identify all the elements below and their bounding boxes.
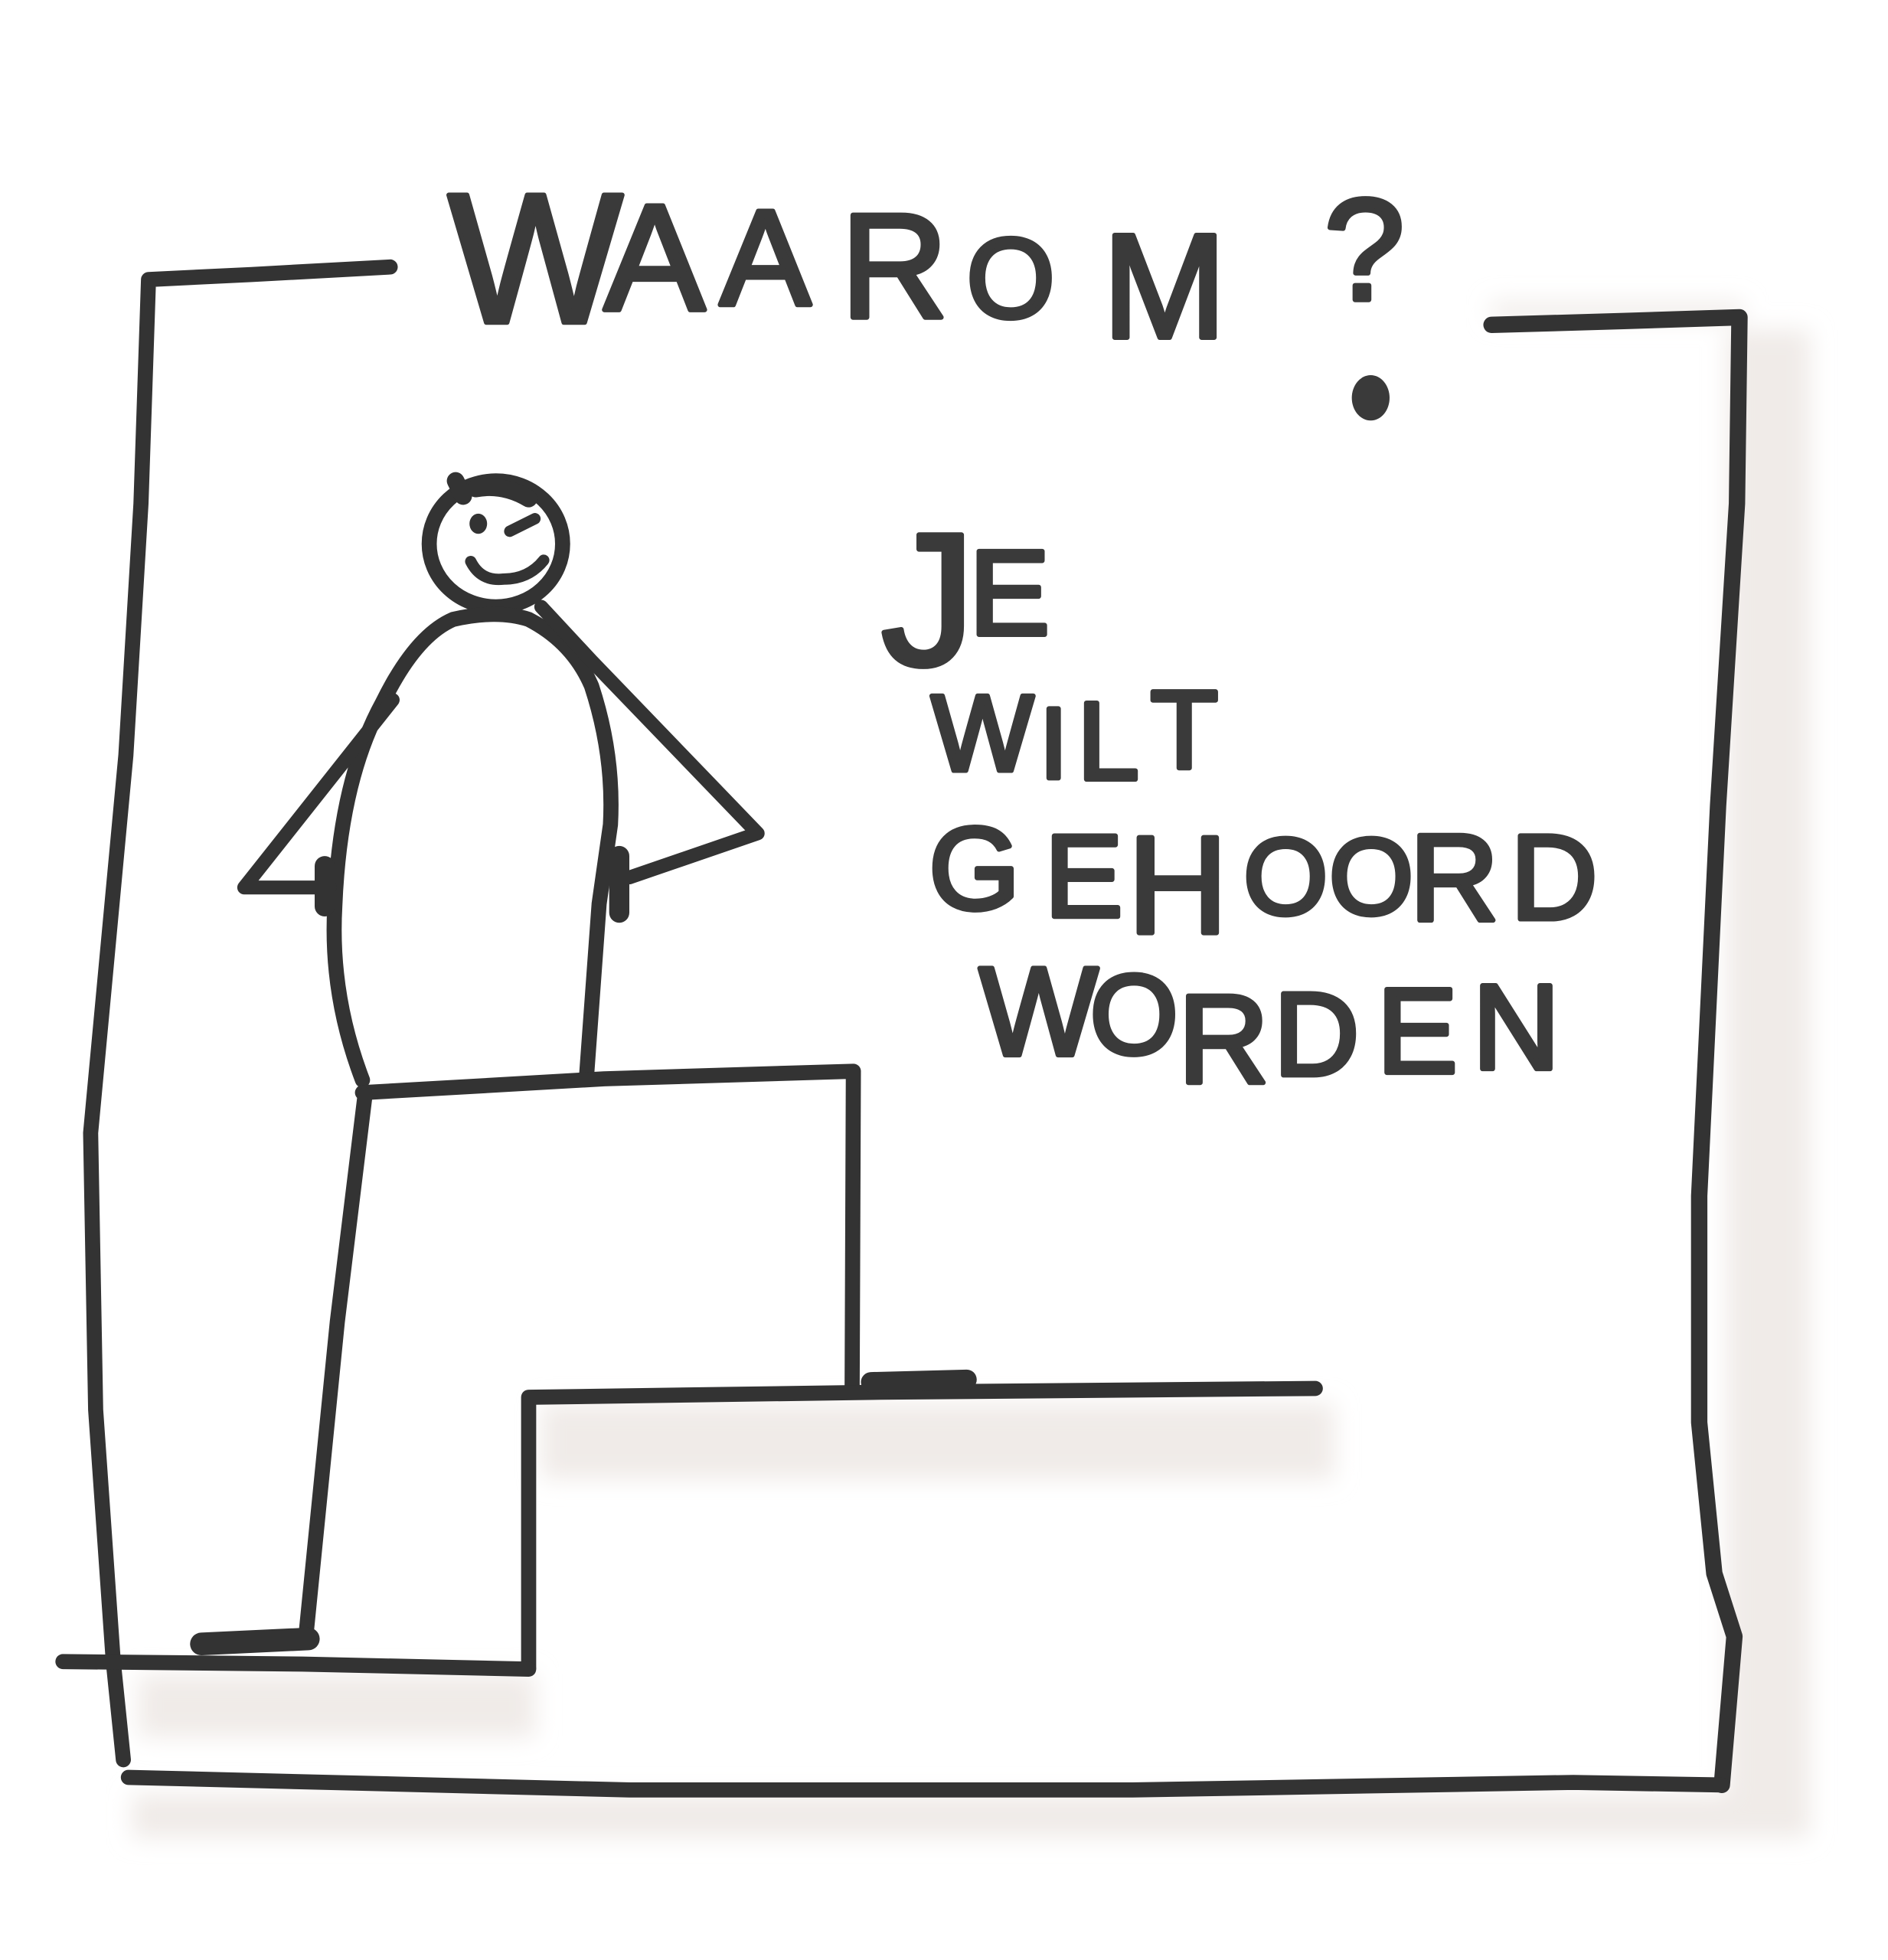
text: je wilt gehoord worden: H [1128, 808, 1228, 962]
text: je wilt gehoord worden: O [1329, 816, 1413, 937]
body [334, 614, 611, 1080]
text: je wilt gehoord worden: E [1045, 812, 1122, 942]
text: je wilt gehoord worden: D [1274, 968, 1359, 1100]
title: Waarom?: O [967, 215, 1055, 341]
right arm [541, 607, 758, 877]
text: je wilt gehoord worden: J [881, 495, 975, 705]
text: je wilt gehoord worden: E [969, 526, 1050, 661]
text: je wilt gehoord worden: G [929, 804, 1020, 934]
picture frame [90, 267, 1739, 1790]
text: je wilt gehoord worden: I [1040, 687, 1067, 799]
title: Waarom?: W [448, 155, 622, 362]
text: je wilt gehoord worden: E [1377, 964, 1458, 1099]
paper shadows [132, 302, 1810, 1838]
stick figure [244, 481, 758, 1080]
left arm [244, 700, 393, 887]
text: je wilt gehoord worden: W [932, 672, 1034, 793]
title: Waarom?: M [1102, 204, 1227, 370]
text: je wilt gehoord worden: D [1511, 810, 1598, 945]
text: je wilt gehoord worden: W [979, 941, 1098, 1082]
head [430, 481, 563, 607]
text: je wilt gehoord worden [881, 495, 1598, 1109]
title: Waarom?: R [841, 183, 948, 349]
hands [325, 856, 619, 913]
staircase [63, 1071, 1315, 1669]
title: Waarom? [448, 155, 1405, 420]
text: je wilt gehoord worden: R [1409, 809, 1499, 947]
text: je wilt gehoord worden: R [1178, 969, 1269, 1109]
title: Waarom?: A [604, 173, 705, 342]
title: Waarom?: ? [1324, 169, 1405, 331]
text: je wilt gehoord worden: L [1077, 679, 1139, 803]
text: je wilt gehoord worden: O [1090, 952, 1178, 1078]
text: je wilt gehoord worden: N [1472, 960, 1560, 1095]
text: je wilt gehoord worden: O [1243, 816, 1328, 937]
title: Waarom?: A [720, 181, 811, 334]
text: je wilt gehoord worden: T [1151, 668, 1218, 792]
